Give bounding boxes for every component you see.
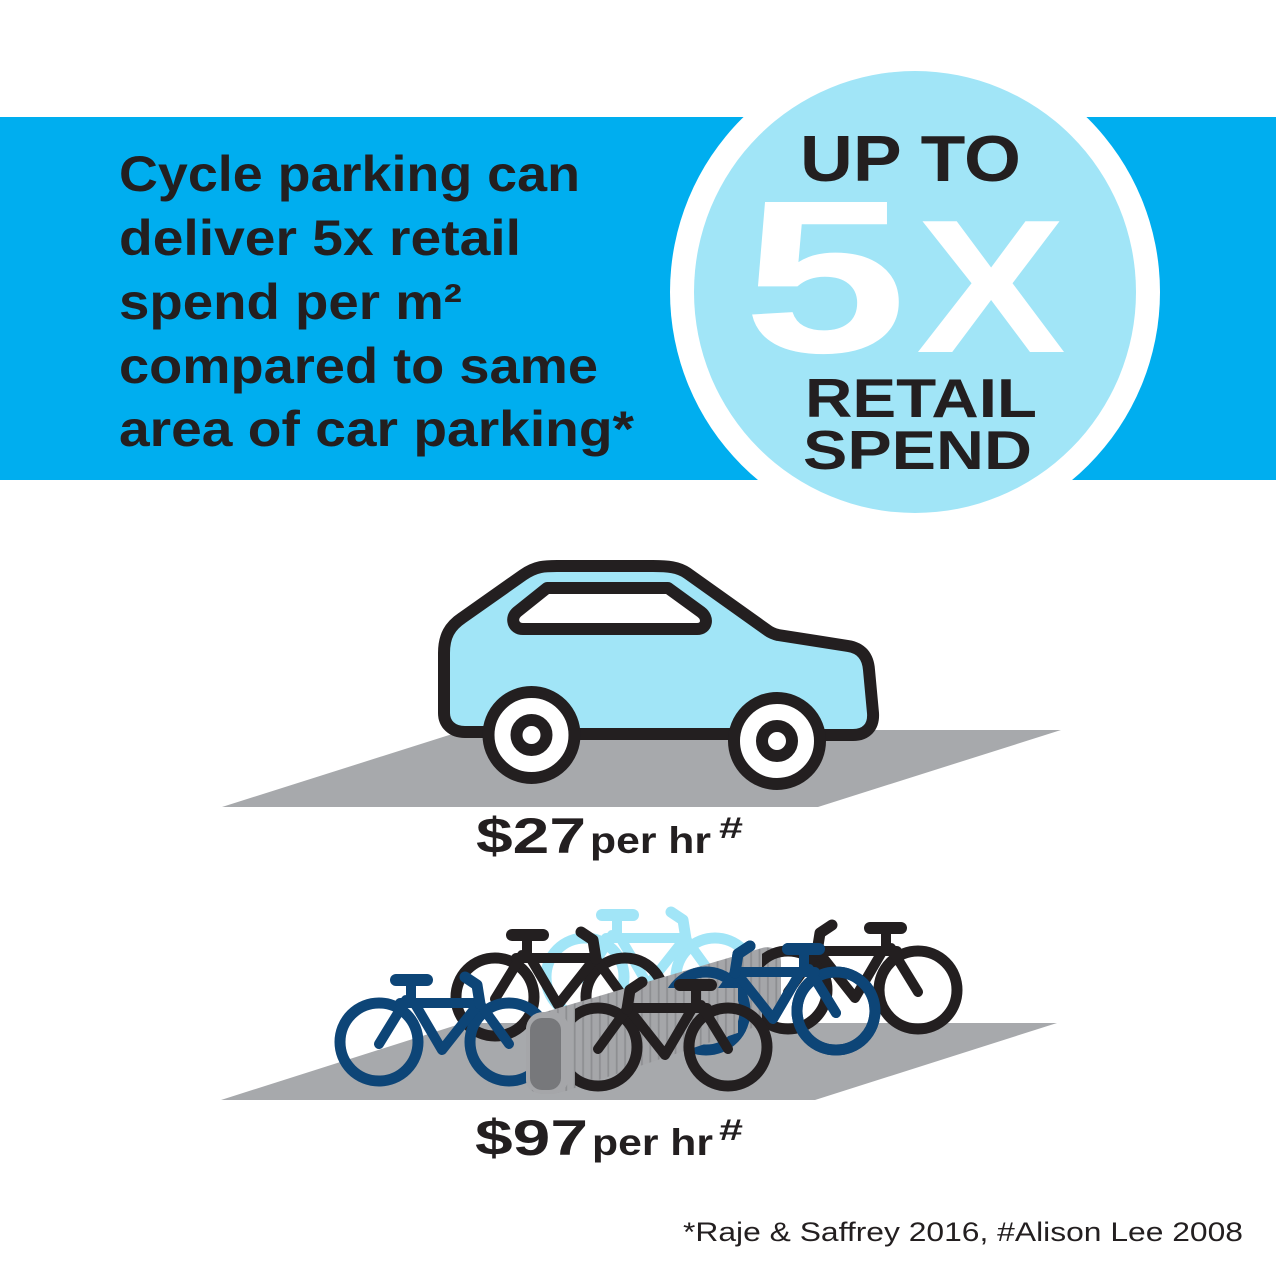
- headline text: Cycle parking can: [119, 146, 580, 202]
- label: car spend: #: [719, 812, 743, 845]
- label: bike spend: [475, 1110, 743, 1166]
- callout circle: up to 5x retail spend: X: [916, 181, 1066, 393]
- icon: navy bike, frame over rack: [667, 946, 875, 1050]
- callout circle: up to 5x retail spend: [670, 47, 1160, 537]
- icon: car: [444, 566, 873, 784]
- headline text: [119, 146, 635, 457]
- car parking ground: [222, 730, 1061, 807]
- callout circle: up to 5x retail spend: UP TO: [800, 122, 1021, 195]
- callout circle: up to 5x retail spend: 5: [743, 156, 907, 399]
- callout circle: up to 5x retail spend: SPEND: [803, 419, 1032, 481]
- headline text: spend per m²: [119, 274, 462, 330]
- bike parking ground: [221, 1023, 1057, 1100]
- label: car spend: per hr: [590, 820, 711, 861]
- headline text: compared to same: [119, 338, 598, 394]
- label: bike spend: per hr: [592, 1122, 713, 1163]
- icon: black bike, rear left: [456, 932, 664, 1036]
- illustration: bikes and rack: [340, 912, 957, 1094]
- label: car spend: $27: [476, 808, 586, 864]
- label: bike spend: $97: [475, 1110, 588, 1166]
- headline text: deliver 5x retail: [119, 210, 521, 266]
- icon: light blue bike: [546, 912, 754, 1016]
- icon: black bike, front centre: [559, 982, 767, 1086]
- callout circle: up to 5x retail spend: RETAIL: [805, 367, 1037, 429]
- icon: bike rack: [526, 947, 781, 1094]
- label: car spend: [476, 808, 743, 864]
- header banner: [0, 117, 1276, 480]
- source footnote: *Raje & Saffrey 2016, #Alison Lee 2008: [683, 1217, 1243, 1247]
- icon: navy bike, behind rack: [667, 946, 875, 1050]
- icon: black bike, rear right: [749, 925, 957, 1029]
- icon: navy bike, front left: [340, 977, 548, 1081]
- headline text: area of car parking*: [119, 401, 635, 457]
- label: bike spend: #: [719, 1114, 743, 1147]
